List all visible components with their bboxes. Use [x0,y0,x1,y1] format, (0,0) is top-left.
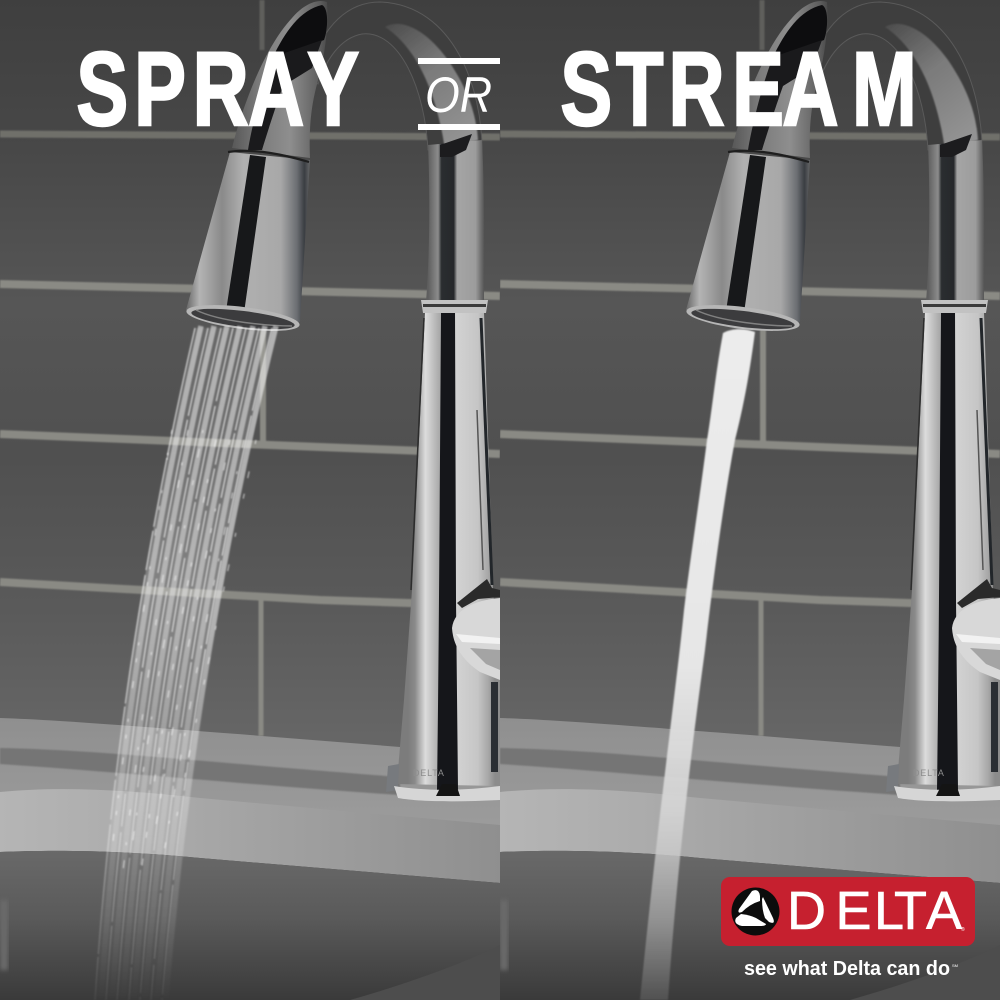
icon: Delta triangle mark [732,888,780,936]
title: SPRAY: SPRAY [76,30,359,148]
spray water: many fine streams [95,326,278,1000]
solid stream of water [640,329,755,1000]
panel: spray (left half) [0,0,500,1000]
title: STREAM: STREAM [560,30,917,148]
title: OR with rules: OR [425,67,492,123]
icon: chrome faucet, right [685,1,1000,801]
tile wall, counter and sink background [0,0,500,1000]
icon: chrome faucet with pull-down head [185,1,500,801]
logo: Delta badge and tagline [721,877,975,980]
logo: Delta badge and tagline: SM [952,963,958,968]
DELTA wordmark: DELTA [787,881,962,941]
tagline: see what Delta can do [744,958,950,980]
red badge [721,877,975,946]
tile wall, counter and sink background, right [500,0,1000,1000]
panel: stream (right half) [500,0,1000,1000]
logo: Delta badge and tagline: ® [961,926,965,933]
